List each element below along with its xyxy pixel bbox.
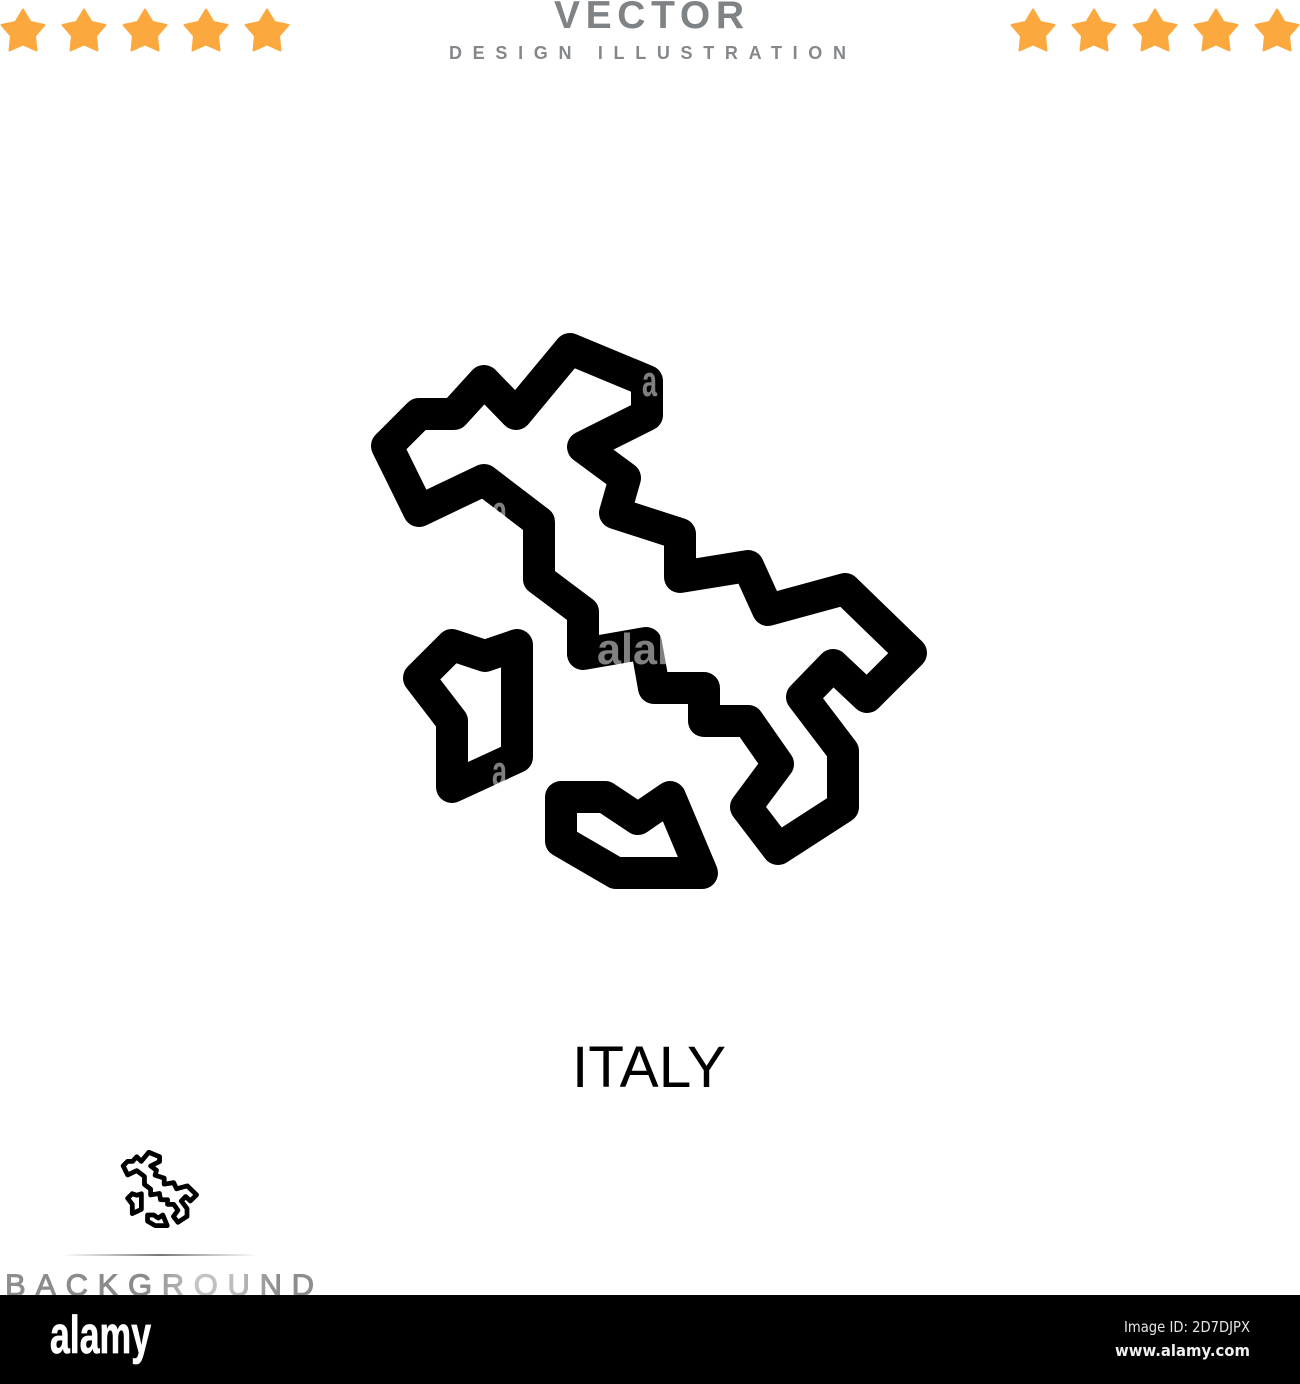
Sicily [561,797,702,873]
divider line [62,1254,258,1256]
right star rating [1012,10,1298,50]
label: BACKGROUND: BACKGROUND [5,1268,314,1302]
footer bar [0,1295,1300,1384]
icon title: ITALY: ITALY [572,1035,726,1100]
left star rating [2,10,288,50]
subheading: DESIGN ILLUSTRATION: DESIGN ILLUSTRATION [449,43,846,63]
watermark marks on the icon [492,357,669,796]
Sardinia [419,645,517,787]
watermark marks on the icon: a [492,747,507,796]
logo: alamy: alamy [50,1306,151,1365]
watermark marks on the icon: a [642,357,657,406]
mainland [387,349,911,849]
watermark marks on the icon: alal [597,625,669,674]
watermark marks on the icon: a [492,487,507,536]
image id: Image ID: 2D7DJPX [1124,1318,1250,1336]
icon: Italy map outline [387,349,911,873]
website: www.alamy.com [1115,1341,1250,1360]
small icon: Italy map [123,1152,197,1226]
